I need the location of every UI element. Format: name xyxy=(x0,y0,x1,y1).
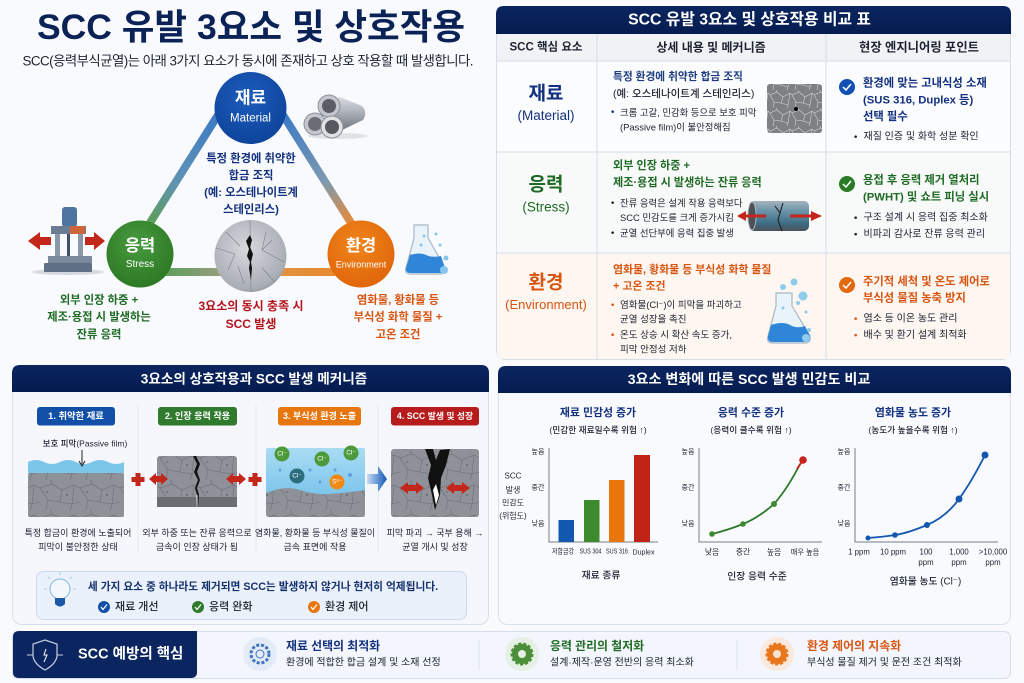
node: material xyxy=(214,72,286,144)
line chart: environment: 염화물 농도 (Cl⁻) xyxy=(890,574,961,588)
line chart: environment: 중간 xyxy=(838,482,851,492)
row: stress: • xyxy=(611,228,615,238)
step 3: corrosive environment: Cl⁻ xyxy=(346,450,356,456)
bar chart: material: 저합금강 xyxy=(552,546,574,556)
panel: SCC mechanism xyxy=(12,365,489,624)
check icon xyxy=(839,79,855,95)
node: material: Material xyxy=(230,112,271,124)
row: material: 재료 xyxy=(529,82,563,104)
node: stress: Stress xyxy=(126,259,154,270)
line chart: environment: 염화물 농도 증가 xyxy=(875,405,951,419)
icon: light bulb xyxy=(44,572,76,606)
triangle connectors xyxy=(148,115,353,272)
point: stress management: 설계·제작·운영 전반의 응력 최소화 xyxy=(550,656,694,668)
line chart: environment: >10,000 xyxy=(979,548,1008,556)
step 1: vulnerable material: 1. 취약한 재료 xyxy=(48,410,104,421)
text: environment description: 고온 조건 xyxy=(376,328,420,341)
row: stress: 비파괴 감사로 잔류 응력 관리 xyxy=(864,228,985,240)
bar chart: material: 재료 종류 xyxy=(582,570,620,582)
line chart: stress: 높음 xyxy=(767,548,781,556)
row: material: 환경에 맞는 고내식성 소재 xyxy=(863,76,987,90)
row: stress: 용접 후 응력 제거 열처리 xyxy=(863,172,980,186)
line chart: environment: ppm xyxy=(918,558,934,567)
line chart: environment: 10 ppm xyxy=(880,548,906,556)
row: stress: SCC 민감도를 크게 증가시킴 xyxy=(620,212,734,223)
node: stress: 응력 xyxy=(125,236,155,255)
point: environment control: 부식성 물질 제거 및 운전 조건 최적화 xyxy=(807,656,962,668)
text: SCC occurrence: 3요소의 동시 충족 시 xyxy=(198,299,304,313)
row: stress: 외부 인장 하중 + xyxy=(613,159,690,172)
step 2: tensile stress: 외부 하중 또는 잔류 응력으로 xyxy=(142,527,252,538)
table header bar xyxy=(496,6,1011,34)
step 1: vulnerable material: 특정 합금이 환경에 노출되어 xyxy=(25,527,131,538)
row: material xyxy=(517,70,987,142)
row: material: • xyxy=(611,106,615,118)
row: environment: 균열 성장을 촉진 xyxy=(620,314,686,326)
line chart: stress: 낮음 xyxy=(705,546,719,556)
row: material: 재질 인증 및 화학 성분 확인 xyxy=(864,130,979,142)
step 3: corrosive environment: Cl⁻ xyxy=(317,456,327,462)
footer title block xyxy=(13,631,197,678)
step 4: SCC growth: 4. SCC 발생 및 성장 xyxy=(397,410,473,421)
line chart: environment: (농도가 높을수록 위험 ↑) xyxy=(868,424,958,435)
line chart: stress: 낮음 xyxy=(682,518,695,528)
bar chart: material: SUS 304 xyxy=(580,548,602,556)
point: stress management xyxy=(505,637,694,671)
text: material description: 스테인리스) xyxy=(223,202,279,216)
row: material: 특정 환경에 취약한 합금 조직 xyxy=(613,70,743,83)
bar chart: material: 민감도 xyxy=(502,498,524,508)
cracked metal disc xyxy=(214,220,286,292)
point: material selection: 재료 선택의 최적화 xyxy=(286,639,380,653)
panel: comparison table xyxy=(496,6,1011,360)
step 3: corrosive environment xyxy=(255,407,375,552)
plus sign xyxy=(248,473,262,486)
line chart: environment: 낮음 xyxy=(838,518,851,528)
row: material: 크롬 고갈, 민감화 등으로 보호 피막 xyxy=(620,107,757,118)
row: stress: 균열 선단부에 응력 집중 발생 xyxy=(620,228,734,238)
node: environment: 환경 xyxy=(346,236,376,255)
point: environment control: 환경 제어의 지속화 xyxy=(807,639,901,653)
text: stress description: 외부 인장 하중 + xyxy=(60,294,139,306)
line chart: environment: ppm xyxy=(951,558,967,567)
row: environment: (Environment) xyxy=(505,297,587,312)
callout: removing one element: 재료 개선 xyxy=(115,599,159,613)
node: environment: Environment xyxy=(336,260,387,270)
line chart: stress xyxy=(682,405,822,582)
row: material: (SUS 316, Duplex 등) xyxy=(863,94,973,106)
line chart: stress: 높음 xyxy=(682,448,695,456)
table header bar: SCC 유발 3요소 및 상호작용 비교 표 xyxy=(628,10,871,28)
bar chart: material: Duplex xyxy=(632,548,655,556)
row: environment: 염화물(Cl⁻)이 피막을 파괴하고 xyxy=(620,299,742,311)
row: stress: (Stress) xyxy=(522,200,570,214)
row: environment: • xyxy=(854,330,858,341)
row: environment: 부식성 물질 농축 방지 xyxy=(863,292,966,304)
bar chart: material: 중간 xyxy=(532,482,545,492)
bar chart: material xyxy=(499,405,658,582)
row: material: • xyxy=(854,132,858,142)
row: stress: • xyxy=(854,229,858,240)
column headers: 상세 내용 및 메커니즘 xyxy=(656,40,766,54)
icon: steel pipes xyxy=(304,95,368,139)
line chart: stress: 인장 응력 수준 xyxy=(727,570,787,582)
icon: shield xyxy=(27,640,63,670)
image: grain structure xyxy=(767,84,822,133)
column headers: 현장 엔지니어링 포인트 xyxy=(859,40,979,54)
row: stress: (PWHT) 및 쇼트 피닝 실시 xyxy=(863,190,989,204)
row: environment: 피막 안정성 저하 xyxy=(620,344,687,356)
row: stress xyxy=(522,159,989,240)
row: material: 선택 필수 xyxy=(863,110,908,123)
line chart: environment: 높음 xyxy=(838,448,851,456)
line chart: stress: (응력이 클수록 위험 ↑) xyxy=(710,424,792,435)
image: flask with bubbles xyxy=(768,278,811,343)
step 3: corrosive environment: 염화물, 황화물 등 부식성 물질이 xyxy=(255,527,375,538)
row: environment: 온도 상승 시 확산 속도 증가, xyxy=(620,329,732,341)
bar chart: material: SCC xyxy=(505,472,522,480)
text: stress description xyxy=(47,294,151,341)
callout: removing one element: 환경 제어 xyxy=(325,600,369,613)
text: material description xyxy=(204,151,298,216)
row: stress: 제조·용접 시 발생하는 잔류 응력 xyxy=(613,175,762,189)
step 2: tensile stress: 2. 인장 응력 작용 xyxy=(165,410,230,421)
text: stress description: 제조·용접 시 발생하는 xyxy=(47,310,151,324)
text: material description: (예: 오스테나이트계 xyxy=(204,185,298,199)
callout: removing one element: 세 가지 요소 중 하나라도 제거되면 SCC는 발생하지 않거나 현저히 억제됩니다. xyxy=(88,580,438,593)
text: stress description: 잔류 응력 xyxy=(77,328,121,341)
text: material description: 합금 조직 xyxy=(229,168,273,182)
row: environment: • xyxy=(611,300,615,310)
row: stress: 응력 xyxy=(529,174,563,196)
column headers xyxy=(497,34,1010,61)
text: environment description xyxy=(354,292,443,341)
bar chart: material: (위험도) xyxy=(499,512,527,520)
row: material: (Passive film)이 불안정해짐 xyxy=(620,122,731,132)
check icon xyxy=(839,176,855,192)
footer: SCC prevention key points xyxy=(12,631,1010,678)
row: stress: • xyxy=(611,198,615,208)
node: environment xyxy=(328,220,394,288)
footer title block: SCC 예방의 핵심 xyxy=(78,646,183,662)
bar chart: material: (민감한 재료일수록 위험 ↑) xyxy=(549,424,647,435)
charts header bar xyxy=(498,366,1011,393)
check icon xyxy=(839,277,855,293)
line chart: environment xyxy=(838,405,1008,588)
panel: sensitivity charts xyxy=(498,366,1011,624)
line chart: environment: 1 ppm xyxy=(848,548,870,556)
text: material description: 특정 환경에 취약한 xyxy=(206,151,296,165)
plus sign xyxy=(132,473,144,486)
line chart: stress: 응력 수준 증가 xyxy=(718,405,784,419)
icon: flask xyxy=(406,225,448,274)
row: environment: • xyxy=(611,330,615,340)
row: material: (예: 오스테나이트계 스테인리스) xyxy=(613,87,754,100)
row: environment: 염소 등 이온 농도 관리 xyxy=(864,312,957,324)
triangle diagram xyxy=(28,72,448,341)
bar chart: material: 발생 xyxy=(506,484,520,494)
icon: tensile press with arrows xyxy=(28,207,105,275)
step 1: vulnerable material: 피막이 불안정한 상태 xyxy=(38,542,118,552)
row: environment: 염화물, 황화물 등 부식성 화학 물질 xyxy=(613,262,771,276)
step 3: corrosive environment: Cl⁻ xyxy=(292,472,302,480)
point: material selection: 환경에 적합한 합금 설계 및 소재 선정 xyxy=(286,656,441,668)
row: environment: 환경 xyxy=(529,272,563,294)
row: stress: 구조 설계 시 응력 집중 최소화 xyxy=(864,212,988,224)
arrow: to step 4 xyxy=(367,466,387,492)
step 1: vulnerable material: 보호 피막(Passive film) xyxy=(43,438,127,448)
text: environment description: 부식성 화학 물질 + xyxy=(354,310,443,324)
point: environment control xyxy=(760,637,962,671)
step 3: corrosive environment: 금속 표면에 작용 xyxy=(284,542,346,552)
step 3: corrosive environment: 3. 부식성 환경 노출 xyxy=(283,410,356,421)
text: SCC occurrence: SCC 발생 xyxy=(226,317,276,331)
line chart: stress: 중간 xyxy=(736,546,750,556)
subtitle: SCC(응력부식균열)는 아래 3가지 요소가 동시에 존재하고 상호 작용할 때 발생합니다. xyxy=(22,54,474,68)
node: stress xyxy=(106,220,174,288)
callout: removing one element xyxy=(36,572,466,620)
image: cracked pipe with arrows xyxy=(737,201,822,231)
row: environment: 주기적 세척 및 온도 제어로 xyxy=(863,274,990,288)
bar chart: material: 낮음 xyxy=(532,518,545,528)
row: stress: 잔류 응력은 설계 작용 응력보다 xyxy=(620,198,743,208)
charts header bar: 3요소 변화에 따른 SCC 발생 민감도 비교 xyxy=(628,371,870,387)
mechanism header bar xyxy=(12,365,489,392)
row: environment: • xyxy=(854,314,858,324)
step 4: SCC growth xyxy=(387,407,483,552)
bar chart: material: 재료 민감성 증가 xyxy=(560,405,636,419)
row: material: (Material) xyxy=(517,108,575,123)
line chart: environment: 1,000 xyxy=(949,548,969,556)
step 3: corrosive environment: Cl⁻ xyxy=(277,450,287,458)
line chart: stress: 중간 xyxy=(682,482,695,492)
row: environment xyxy=(505,262,990,356)
text: SCC occurrence xyxy=(198,299,304,331)
line chart: environment: 100 xyxy=(919,548,933,556)
bar chart: material: SUS 316 xyxy=(606,548,628,556)
node: material: 재료 xyxy=(235,88,266,108)
point: material selection xyxy=(243,637,441,671)
line chart: stress: 매우 높음 xyxy=(791,548,820,556)
step 2: tensile stress xyxy=(142,407,252,552)
bar chart: material: 높음 xyxy=(532,448,545,456)
row: stress: • xyxy=(854,212,858,224)
step 4: SCC growth: 균열 개시 및 성장 xyxy=(402,541,468,552)
line chart: environment: ppm xyxy=(985,558,1001,567)
mechanism header bar: 3요소의 상호작용과 SCC 발생 메커니즘 xyxy=(141,372,367,386)
row: environment: + 고온 조건 xyxy=(613,280,666,292)
callout: removing one element: 응력 완화 xyxy=(209,600,253,613)
step 2: tensile stress: 금속이 인장 상태가 됨 xyxy=(156,541,238,552)
step 3: corrosive environment: S²⁻ xyxy=(332,478,343,486)
title: SCC 유발 3요소 및 상호작용 xyxy=(37,7,465,47)
step 4: SCC growth: 피막 파괴 → 국부 용해 → xyxy=(387,528,483,538)
row: environment: 배수 및 환기 설계 최적화 xyxy=(864,329,967,341)
point: stress management: 응력 관리의 철저화 xyxy=(550,639,644,653)
column headers: SCC 핵심 요소 xyxy=(510,40,583,54)
step 1: vulnerable material xyxy=(25,407,131,552)
text: environment description: 염화물, 황화물 등 xyxy=(357,292,439,306)
